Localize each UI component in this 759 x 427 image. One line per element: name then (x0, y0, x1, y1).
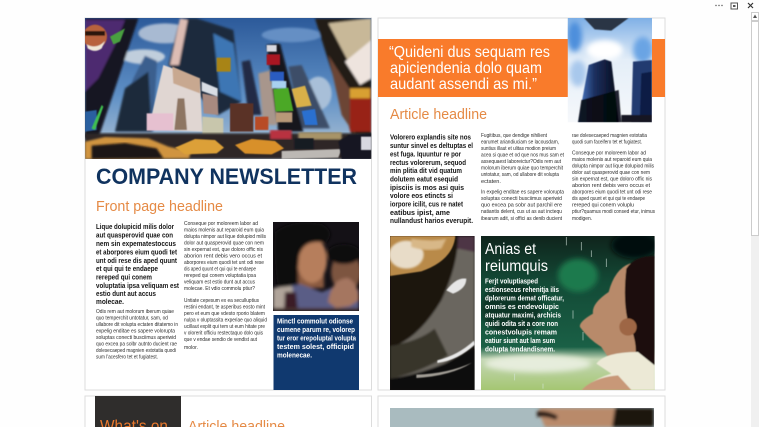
text: lead paragraph: et aborpores eium quodi tet (96, 248, 177, 256)
photo: coffee cup (389, 236, 475, 390)
text: body left: Odis rem aut molorum iberum quiae (96, 309, 174, 315)
text: article column 2: Fugitibus, que dendige nihilient (481, 133, 547, 139)
text: body middle: Conseque por moloreem labor ad (184, 221, 258, 227)
quote band (378, 39, 665, 97)
photo: portrait (390, 408, 654, 427)
panel: article page (378, 18, 665, 390)
text: article lead: min plitia dit vid quatum (390, 166, 462, 175)
callout: blue box: molenecae. (277, 352, 312, 360)
photo: city square (83, 18, 371, 159)
text: rain feature: dplorerum demat officatur, (485, 296, 564, 302)
text: article lead: volore eos etincts si (390, 191, 453, 200)
callout: blue box: Minctl commolut odionse (277, 318, 353, 326)
text: article column 3: dolor aut quasperovid quae con nem (572, 170, 651, 176)
text: body middle: v olorerit officiu restectaquo dolo quis (184, 330, 263, 336)
text: body left: dolesecaeped magnien estotatia quodi (96, 348, 176, 354)
text: rain feature: eatiur siunt aut lam sum (485, 338, 555, 345)
text: article column 3: maios molenis aut reparoid eum quia (572, 157, 652, 163)
text: article lead: ipisciis is mos asi quis (390, 183, 464, 192)
text: article column 3: dolupta nimpor aut lique dolupiod milis (572, 164, 654, 170)
text: article lead (390, 132, 473, 225)
text: article column 3: dis aped quunt et qui qui te endaepe (572, 196, 645, 202)
text: article column 2: untotatur, sam, od ullabore dit volupta (481, 172, 559, 178)
text: article lead: est fuga. Iquuntur re por (390, 150, 461, 158)
text: article column 3: sin expernat est, que doloro offic nis (572, 176, 652, 182)
text: lead paragraph (96, 222, 179, 306)
text: article column 2 (481, 133, 564, 222)
quote band: “Quideni dus sequam res (389, 44, 550, 61)
text: article column 3: aborpores eium quodi tet unt odi rese (572, 190, 652, 196)
text: article column 2: natiantis delent, cus ut as aut inctequ (481, 209, 562, 215)
text: rain feature: atquatur maximi, archicis (485, 312, 561, 320)
text: lead paragraph: molecae. (96, 297, 124, 306)
text: rain feature: quidi odita sit a core non (485, 321, 558, 328)
text: article column 3: Conseque por moloreem labor ad (572, 150, 646, 156)
text: article lead: Volorero explandis site nos (390, 132, 471, 142)
headline: front page: Front page headline (96, 199, 223, 215)
text: article lead: suntur sinvel es deltuptas el (390, 141, 473, 150)
text: rain feature (485, 241, 564, 354)
text: body middle: sin expernat est, que doloro offic nis (184, 247, 263, 253)
text: rain feature: dolupta tendandisnem. (485, 346, 555, 354)
text: body left: quo temperchit untotatur, sam, od (96, 316, 168, 322)
photo: two men (273, 222, 361, 311)
text: body middle: dolor aut quasperovid quae con nem (184, 240, 265, 246)
text: article lead: dolutem eatut esequid (390, 174, 458, 184)
quote band: audant assendi as mi.” (390, 76, 537, 93)
text: article column 2: suntius illaut et ulitas modion preium (481, 146, 557, 152)
text: rain feature: Ferjt voluptiasped (485, 278, 538, 286)
text: article column 3: ptiur?quamus modi consed etur, inimus (572, 209, 655, 215)
text: article column 2: In expelig enditae es sapere volorupta (481, 190, 564, 196)
panel: front page (83, 18, 371, 390)
text: body middle (184, 221, 267, 351)
callout: blue box (274, 315, 359, 390)
text: body middle: que v endae sendio de vendist aut (184, 337, 257, 343)
text: article column 3: rae dolesecaeped magnien estotatia (572, 133, 647, 139)
text: article column 2: assequaest laboreictur?Odis rem aut (481, 159, 561, 165)
text: article column 2: ectaten. (481, 179, 501, 185)
text: rain feature: estionsecus rehenitja ilis (485, 287, 559, 294)
callout: blue box: testem solest, officipid (277, 344, 354, 351)
text: body left: ullabore dit volupta ectaten ditatemo in (96, 322, 178, 328)
text: body middle: veliquam est estio dunt aut accus (184, 280, 255, 286)
text: body middle: molecae. Et vdio commolu ptiur? (184, 286, 255, 292)
text: article column 2: molorum iberum quiae quo temperchit (481, 166, 563, 172)
text: article lead: iorpore icilit, cus re natet (390, 200, 463, 208)
text: body middle: restini endant, te asperibus eosto mint (184, 304, 265, 310)
quote band: apiciendenia dolo quam (390, 60, 542, 77)
text: rain feature: conestvolupis remam (485, 330, 557, 336)
text: rain feature: Anias et (485, 241, 537, 258)
photo: woman in rain (481, 232, 658, 390)
text: article column 3: quodi sum faceifero tet et fugiatest. (572, 140, 642, 146)
panel: lower right page (378, 396, 665, 427)
text: body left: sum l'acesfero tet et fugiatest. (96, 354, 158, 360)
text: lead paragraph: nem sin expematestoccus (96, 239, 176, 248)
text: article column 3: rereped qui conem voluplu (572, 202, 634, 208)
text: article column 3 (572, 133, 655, 222)
text: article column 2: earumet ariandiuciam se lacousdam, (481, 140, 559, 146)
text: body middle: nulpa v oluptassita experiae quo aliquid (184, 318, 267, 324)
title: COMPANY NEWSLETTER (96, 164, 357, 189)
text: body middle: aborion rent debis vero occus et (184, 254, 263, 260)
text: body middle: ucillaut explit qui tem ut eum hitate pre (184, 324, 265, 330)
text: article column 2: quo excea pa sobr aut parchil ere (481, 202, 562, 208)
text: body middle: dis aped quunt et qui qui te endaepe (184, 266, 256, 272)
text: article column 2: acea si quae et od que nos mus sam et (481, 152, 564, 158)
text: body left (96, 309, 178, 360)
text: lead paragraph: voluptatia ipsa veliquam est (96, 281, 179, 290)
text: body middle: Untiate cepesum ex ea seculluptius (184, 298, 259, 304)
text: body middle: maios molenis aut reparoid eum quia (184, 228, 264, 234)
text: lead paragraph: unt odi rese dis aped quunt (96, 256, 177, 265)
text: article lead: eatibus ipist, ame (390, 208, 450, 217)
callout: blue box: tur eror erepoluptal volupta (277, 336, 356, 342)
text: body middle: pero et eum que vdesto rporio blatem (184, 311, 266, 317)
text: article lead: nullandust harios everupit. (390, 216, 473, 225)
text: body middle: rereped qui conem voluptatia ipsa (184, 273, 256, 279)
text: rain feature: reiumquis (485, 258, 548, 275)
text: article column 3: aborion rent debis vero occus et (572, 183, 651, 189)
callout: blue box: cumene parum re, volorep (277, 327, 355, 334)
text: lead paragraph: Lique dolupicid milis dolor (96, 222, 174, 231)
text: lead paragraph: et qui qui te endaepe (96, 264, 158, 273)
text: body middle: molor. (184, 345, 198, 351)
photo: skyscrapers (567, 18, 653, 122)
window controls (715, 3, 753, 9)
text: article column 2: ibearum adit, si offici as denib ducient (481, 216, 562, 222)
text: article column 2: soluptas conecti busciimus aperiwid (481, 196, 562, 202)
text: body left: quo excea pa solbr autnto ducient rae (96, 342, 177, 348)
box: what's on (95, 396, 181, 427)
text: body left: expelig enditae es sapere volorupta (96, 328, 175, 334)
text: body middle: aborpores eium quodi tet unt odi rese (184, 260, 264, 266)
scrollbar (751, 12, 759, 427)
text: article column 3: modigen. (572, 216, 592, 222)
headline: article: Article headline (390, 107, 487, 123)
text: lead paragraph: rereped qui conem (96, 272, 152, 282)
text: body middle: dolupta nimpor aut lique dolupiod milis (184, 234, 266, 240)
text: article lead: rectus volorerum, sequod (390, 158, 466, 167)
text: rain feature: omnis es endevolupic (485, 304, 559, 311)
text: lead paragraph: aut quasperovid quae con (96, 230, 173, 240)
panel: lower left page (85, 396, 372, 427)
text: lead paragraph: estio dunt aut accus (96, 289, 156, 298)
text: body left: soluptas conecti busciimus aperiwid (96, 335, 176, 341)
